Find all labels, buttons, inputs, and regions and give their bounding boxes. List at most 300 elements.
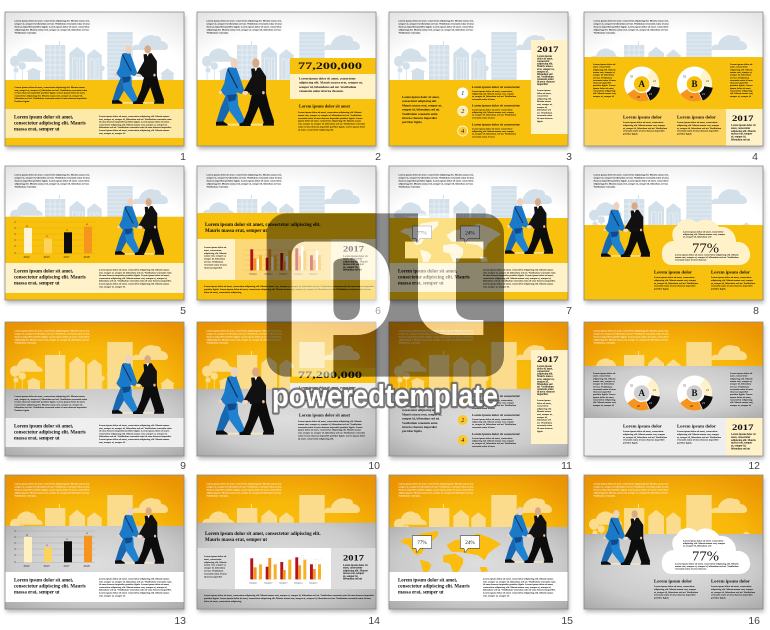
right paragraph: massa erat, semper ut,	[730, 380, 753, 383]
big number: 77,200,000	[298, 61, 363, 71]
heading: Lorem ipsum dolor sit amet,	[14, 579, 74, 584]
grouped chart: Category 5	[309, 581, 317, 584]
cloud callout: venenatis enim id urna rhoncus	[675, 568, 706, 570]
top paragraph: rhoncus imperdiet porttitor ligula. Lorem ipsum dolor sit amet, consectetur	[206, 180, 282, 182]
yellow band	[584, 225, 763, 300]
businessmen handshake	[112, 45, 165, 104]
top paragraph: Vestibulum venenatis.	[206, 186, 229, 188]
right paragraph: erat, semper ut, semper id.	[99, 441, 126, 444]
top paragraph: Lorem ipsum dolor sit amet, consectetur adipiscing elit. Mauris massa erat,	[398, 330, 474, 332]
heading: consectetur adipiscing elit. Mauris	[14, 122, 86, 126]
column 1 text: ut, semper id, bibendum sed mi. Vestibulum	[654, 282, 698, 285]
city skyline	[589, 186, 754, 234]
year: 2017	[732, 114, 754, 123]
column 2 text: Lorem ipsum dolor sit amet, consectetur	[677, 121, 718, 124]
gray band	[5, 389, 184, 456]
year bold text: adipiscing elit. Mauris	[731, 439, 756, 442]
top paragraph: rhoncus imperdiet porttitor ligula. Lorem ipsum dolor sit amet, consectetur	[14, 26, 90, 28]
callout 77 percent	[412, 536, 432, 553]
slide 4: donut charts	[584, 12, 764, 149]
callout 24 percent: 24%	[465, 230, 475, 236]
column 1 text	[623, 116, 667, 136]
left paragraph: amet, consectetur	[593, 66, 611, 69]
city skyline	[10, 186, 175, 234]
top paragraph: adipiscing elit. Mauris massa erat, semper ut, semper id, bibendum sed mi.	[594, 338, 669, 342]
column 1 text: Lorem ipsum dolor	[623, 116, 662, 120]
slide 1: intro with handshake	[5, 12, 185, 149]
right paragraph: adipiscing elit. Mauris	[730, 68, 752, 71]
box text: semper id, bibendum sed mi. Vestibulum	[299, 394, 356, 398]
slide 5: bar columns	[5, 166, 185, 303]
top paragraph: rhoncus imperdiet porttitor ligula. Lorem ipsum dolor sit amet, consectetur	[594, 26, 669, 28]
list item 2: Lorem ipsum dolor sit amet, consectetur	[472, 418, 513, 421]
side paragraph: mi. Vestibulum	[537, 111, 552, 114]
column 2 text: Lorem ipsum dolor	[677, 116, 716, 120]
list item 3: 4	[461, 437, 464, 444]
heading: massa erat, semper ut	[14, 128, 60, 133]
top paragraph: Lorem ipsum dolor sit amet, consectetur adipiscing elit. Mauris massa erat,	[594, 330, 669, 332]
left paragraph: sed mi. Vestibulum	[204, 570, 223, 572]
paragraph: venenatis enim id urna rhoncus imperdiet porttitor ligula. Lorem	[298, 117, 363, 120]
city skyline	[394, 32, 559, 80]
column chart: 2018	[84, 255, 90, 259]
left paragraph: adipiscing elit. Mauris	[593, 68, 615, 71]
column chart: 2017	[64, 255, 70, 259]
top paragraph: semper ut, semper id, bibendum sed mi. Vestibulum venenatis enim id urna	[594, 22, 670, 26]
side paragraph: adipiscing elit.	[537, 97, 552, 100]
donut A: 21	[649, 92, 652, 96]
slide numbers: 16	[748, 615, 760, 627]
column 1 text: adipiscing elit. Mauris massa erat, semper	[654, 279, 696, 282]
column 1 text: Lorem ipsum dolor sit amet, consectetur	[623, 121, 664, 124]
right paragraph: consectetur adipiscing elit. Mauris massa erat, semper ut, semper id,	[483, 586, 552, 589]
column chart: 35	[66, 539, 68, 541]
year bold text: bibendum sed mi	[731, 138, 750, 142]
slide numbers: 5	[180, 305, 186, 317]
left paragraph: semper id, bibendum	[593, 74, 614, 77]
column 2 text: ut, semper id, bibendum sed mi. Vestibulum	[711, 591, 755, 594]
side panel	[531, 350, 568, 444]
callout 77 percent: 77%	[417, 540, 427, 546]
slide numbers: 8	[753, 305, 759, 317]
donut B: 21	[702, 92, 706, 96]
top paragraph: Lorem ipsum dolor sit amet, consectetur adipiscing elit. Mauris massa erat,	[398, 20, 474, 22]
donut A: 55	[630, 384, 634, 388]
right paragraph: sed mi. Vestibulum	[730, 385, 749, 388]
year bold text: Lorem ipsum dolor sit	[731, 433, 756, 436]
column 1 text: venenatis enim id urna rhoncus imperdiet	[654, 285, 696, 288]
cloud callout: venenatis enim id urna rhoncus	[675, 258, 706, 262]
city skyline	[202, 495, 367, 543]
pale band	[389, 263, 568, 292]
grouped chart: Category 3	[279, 581, 287, 584]
top paragraph: Lorem ipsum dolor sit amet, consectetur adipiscing elit. Mauris massa erat,	[398, 174, 474, 176]
left paragraph: adipiscing elit. Mauris	[204, 252, 226, 255]
grouped chart: Category 1	[249, 272, 257, 275]
top paragraph: adipiscing elit. Mauris massa erat, semper ut, semper id, bibendum sed mi.	[14, 28, 90, 32]
column 1 text	[654, 580, 698, 600]
donut B: 21	[706, 79, 710, 83]
paragraph: sit amet, consectetur adipiscing elit.	[298, 128, 334, 131]
left paragraph: rhoncus imperdiet	[204, 266, 222, 269]
column 1 text: adipiscing elit. Mauris massa erat, semper	[623, 433, 665, 436]
column 1 text: ut, semper id, bibendum sed mi. Vestibulum	[623, 127, 667, 130]
slide numbers: 2	[375, 151, 381, 163]
band paragraph: erat, semper ut, semper id, bibendum sed mi. Vestibulum venenatis enim	[14, 398, 87, 401]
right paragraph: Lorem ipsum dolor sit amet, consectetur adipiscing elit. Mauris massa	[99, 129, 170, 132]
paragraph: sit amet, consectetur adipiscing elit.	[298, 437, 334, 440]
side paragraph: venenatis enim	[537, 114, 552, 117]
cloud callout: ut, semper id, bibendum sed	[683, 544, 712, 548]
heading: Lorem ipsum dolor sit amet,	[14, 116, 74, 121]
businessmen handshake	[216, 367, 275, 435]
donut B: 21	[702, 401, 706, 405]
year bold text: ut, semper id,	[343, 266, 358, 269]
band paragraph: bibendum sed mi. Vestibulum venenatis enim id urna rhoncus imperdiet.	[14, 406, 87, 409]
top paragraph: adipiscing elit. Mauris massa erat, semper ut, semper id, bibendum sed mi.	[594, 182, 669, 186]
top paragraph: Lorem ipsum dolor sit amet, consectetur adipiscing elit. Mauris massa erat,	[206, 330, 282, 332]
right paragraph: Lorem ipsum dolor sit amet, consectetur adipiscing elit. Mauris massa	[483, 592, 554, 594]
gray band	[197, 523, 376, 609]
column 1 text: porttitor ligula.	[623, 442, 639, 445]
grouped chart	[244, 555, 324, 584]
list item 1	[458, 394, 521, 410]
slide 10: big number orange theme	[197, 322, 377, 459]
top paragraph: Vestibulum venenatis.	[14, 342, 37, 344]
left paragraph: sed mi. Vestibulum	[593, 385, 612, 388]
column chart: 25	[46, 236, 48, 238]
cloud callout: Lorem ipsum dolor sit amet, consectetur adipiscing elit. Mauris	[675, 254, 738, 256]
lower band	[584, 418, 763, 456]
left paragraph: ipsum dolor sit amet,	[593, 87, 614, 90]
list item 3: ut, semper id, bibendum sed mi. Vestibulum	[472, 442, 516, 445]
footer paragraph: porttitor ligula. Lorem ipsum dolor sit amet, consectetur adipiscing elit. Mauris massa erat, semper ut, semper id, bibendum sed mi. Vestibulum venenatis enim id urna	[204, 597, 372, 600]
side bold text: adipiscing elit.	[537, 63, 553, 66]
top paragraph: adipiscing elit. Mauris massa erat, semper ut, semper id, bibendum sed mi.	[594, 28, 669, 32]
top paragraph: semper ut, semper id, bibendum sed mi. Vestibulum venenatis enim id urna	[594, 486, 670, 488]
top paragraph: semper ut, semper id, bibendum sed mi. Vestibulum venenatis enim id urna	[206, 176, 283, 180]
side bold text: bibendum sed	[537, 73, 553, 76]
heading: Lorem ipsum dolor sit amet, consectetur adipiscing elit.	[205, 532, 321, 537]
left bold text: Mauris massa erat, semper ut,	[402, 103, 442, 107]
left bold text: Vestibulum venenatis enim	[402, 421, 438, 425]
right paragraph: bibendum sed mi. Vestibulum venenatis enim id urna rhoncus imperdiet.	[483, 589, 556, 592]
top paragraph: adipiscing elit. Mauris massa erat, semper ut, semper id, bibendum sed mi.	[594, 492, 669, 494]
top paragraph: semper ut, semper id, bibendum sed mi. Vestibulum venenatis enim id urna	[14, 332, 91, 336]
side paragraph: ligula	[537, 430, 544, 433]
top paragraph: Lorem ipsum dolor sit amet, consectetur adipiscing elit. Mauris massa erat,	[594, 482, 669, 486]
band paragraph: Lorem ipsum dolor sit amet, consectetur adipiscing elit. Mauris massa	[14, 395, 86, 398]
heading: Mauris massa erat, semper ut	[205, 538, 267, 543]
right paragraph: Lorem ipsum dolor sit	[730, 372, 753, 375]
top paragraph: rhoncus imperdiet porttitor ligula. Lorem ipsum dolor sit amet, consectetur	[398, 488, 474, 492]
light row	[197, 548, 376, 589]
year bold text: Lorem ipsum dolor sit	[343, 564, 368, 567]
top paragraph: Lorem ipsum dolor sit amet, consectetur adipiscing elit. Mauris massa erat,	[14, 330, 90, 332]
top paragraph: Vestibulum venenatis.	[206, 494, 229, 498]
callout 77 percent: 77%	[417, 230, 427, 236]
top paragraph: Lorem ipsum dolor sit amet, consectetur adipiscing elit. Mauris massa erat,	[14, 174, 90, 176]
column 1 text: Lorem ipsum dolor sit amet, consectetur	[623, 430, 664, 433]
list item 2: 2	[461, 418, 464, 424]
left bold text: Lorem ipsum dolor sit amet,	[402, 95, 440, 99]
right paragraph: erat, semper ut, semper id, bibendum sed mi. Vestibulum venenatis enim	[99, 427, 172, 430]
year bold text: bibendum sed mi	[343, 578, 362, 580]
right paragraph: elit. Mauris massa erat,	[730, 92, 754, 95]
paragraph: ipsum dolor sit amet, consectetur adipiscing elit. Mauris massa	[298, 120, 362, 123]
slide numbers: 10	[368, 460, 380, 472]
list item 1: ut, semper id, bibendum sed mi. Vestibulum	[472, 95, 516, 98]
column chart: 44	[26, 534, 28, 536]
big number: 77,200,000	[298, 370, 363, 380]
grouped chart: Category 1	[249, 581, 257, 584]
column chart: 2018	[84, 564, 90, 568]
top paragraph: rhoncus imperdiet porttitor ligula. Lorem ipsum dolor sit amet, consectetur	[206, 336, 282, 338]
list item 2: Lorem ipsum dolor sit amet, consectetur	[472, 108, 513, 112]
city skyline	[10, 342, 175, 390]
light band	[5, 418, 184, 447]
column 2 text: porttitor ligula.	[711, 288, 727, 291]
yellow band	[5, 80, 184, 146]
list item 3: venenatis enim id urna	[472, 445, 496, 448]
column 2 text: porttitor ligula.	[711, 597, 727, 600]
list item 2: Lorem ipsum dolor sit consectetur	[472, 413, 521, 417]
left paragraph: sed mi. Vestibulum	[593, 76, 612, 79]
right paragraph: Lorem ipsum dolor sit amet, consectetur adipiscing elit. Mauris massa	[99, 424, 170, 427]
side paragraph: semper id,	[537, 106, 548, 109]
left bold text: id urna rhoncus imperdiet	[402, 425, 438, 429]
top paragraph: Lorem ipsum dolor sit amet, consectetur adipiscing elit. Mauris massa erat,	[14, 482, 90, 486]
top paragraph: rhoncus imperdiet porttitor ligula. Lorem ipsum dolor sit amet, consectetur	[398, 336, 474, 338]
heading: Lorem ipsum dolor sit amet,	[398, 270, 458, 275]
right paragraph: erat, semper ut, semper id.	[99, 132, 126, 135]
grouped chart	[244, 246, 324, 275]
year bold text: ut, semper id,	[343, 575, 358, 578]
right paragraph: porttitor ligula. Lorem	[730, 393, 752, 396]
side bold text: adipiscing elit.	[537, 373, 553, 376]
paragraph: enim id urna rhoncus imperdiet porttitor ligula. Lorem ipsum dolor	[298, 126, 365, 128]
box text: semper id, bibendum sed mi. Vestibulum	[299, 85, 356, 89]
top paragraph: rhoncus imperdiet porttitor ligula. Lorem ipsum dolor sit amet, consectetur	[14, 180, 90, 182]
top paragraph: semper ut, semper id, bibendum sed mi. Vestibulum venenatis enim id urna	[398, 176, 475, 180]
top paragraph: adipiscing elit. Mauris massa erat, semper ut, semper id, bibendum sed mi.	[206, 492, 282, 494]
paragraph: massa erat, semper ut, semper id, bibendum sed mi. Vestibulum	[298, 114, 362, 117]
top paragraph: rhoncus imperdiet porttitor ligula. Lorem ipsum dolor sit amet, consectetur	[398, 26, 474, 28]
left paragraph: elit. Mauris massa erat,	[593, 92, 617, 95]
cloud callout: 77%	[692, 549, 719, 564]
column chart	[14, 222, 95, 259]
year bold text: Lorem ipsum dolor sit	[731, 124, 756, 127]
column chart: 25	[46, 545, 48, 547]
year: 2017	[732, 423, 754, 432]
column chart: 45	[86, 224, 88, 226]
donut A: 20	[637, 95, 640, 99]
column 2 text	[677, 116, 721, 136]
top paragraph: Vestibulum venenatis.	[206, 32, 229, 34]
grouped chart: Category 3	[279, 272, 287, 275]
year bold text: bibendum sed mi	[731, 448, 750, 450]
left bold text: Lorem ipsum dolor sit amet,	[402, 404, 440, 408]
top paragraph: semper ut, semper id, bibendum sed mi. Vestibulum venenatis enim id urna	[398, 486, 475, 488]
band paragraph: consectetur adipiscing elit. Mauris massa erat, semper ut, semper id,	[14, 94, 83, 97]
city skyline	[10, 495, 175, 543]
cloud callout: massa erat, semper ut, semper id, bibendum sed mi. Vestibulum	[675, 256, 739, 259]
side bold text: bibendum sed	[537, 383, 553, 386]
paragraph: massa erat, semper ut, semper id, bibendum sed mi. Vestibulum	[298, 423, 362, 426]
column 1 text: Lorem ipsum dolor	[654, 580, 692, 584]
band paragraph: consectetur adipiscing elit. Mauris massa erat, semper ut, semper id,	[14, 403, 83, 406]
year bold text: adipiscing elit. Mauris	[343, 569, 368, 572]
slide numbers: 4	[752, 151, 758, 163]
right paragraph: Lorem ipsum dolor sit amet, consectetur adipiscing elit. Mauris massa	[483, 282, 554, 286]
city skyline	[394, 495, 559, 543]
top paragraph: adipiscing elit. Mauris massa erat, semper ut, semper id, bibendum sed mi.	[398, 28, 474, 32]
left bold text: id urna rhoncus imperdiet	[402, 116, 438, 120]
right paragraph: Lorem ipsum dolor sit amet, consectetur adipiscing elit. Mauris massa	[483, 268, 554, 272]
box text: adipiscing elit. Mauris massa erat, semper ut,	[299, 390, 363, 394]
column chart	[14, 530, 95, 568]
slide 6: grouped bar chart	[197, 166, 377, 303]
donut A	[624, 376, 660, 411]
year bold text: ut, semper id,	[731, 445, 746, 448]
year: 2017	[537, 45, 558, 54]
side bold text: id urna rhoncus	[537, 80, 555, 84]
slide 3: numbered list	[389, 12, 569, 149]
right paragraph: erat, semper ut, semper id, bibendum sed mi. Vestibulum venenatis enim	[483, 271, 556, 274]
right paragraph: erat, semper ut, semper id, bibendum sed mi. Vestibulum venenatis enim	[99, 118, 172, 121]
top paragraph: semper ut, semper id, bibendum sed mi. Vestibulum venenatis enim id urna	[206, 332, 283, 336]
left paragraph: ipsum dolor sit amet,	[593, 396, 614, 399]
number bar	[290, 368, 376, 383]
watermark text: poweredtemplate	[272, 378, 498, 413]
list item 1: Lorem ipsum dolor sit amet, consectetur	[472, 399, 513, 402]
band paragraph: Lorem ipsum dolor sit amet, consectetur adipiscing elit. Mauris massa	[14, 86, 86, 89]
side bold text: Mauris massa	[537, 375, 553, 378]
slide numbers: 15	[561, 615, 573, 627]
column 1 text: porttitor ligula.	[654, 288, 670, 291]
lower band	[584, 109, 763, 146]
gray band	[389, 527, 568, 609]
grouped chart: Category 2	[264, 581, 272, 584]
right paragraph: Lorem ipsum dolor sit amet, consectetur adipiscing elit. Mauris massa	[483, 578, 554, 580]
top paragraph: Vestibulum venenatis.	[594, 186, 616, 188]
city skyline	[589, 32, 754, 80]
list item 2: venenatis enim id urna	[472, 116, 496, 119]
left bold text: porttitor ligula	[402, 429, 422, 433]
right paragraph: massa erat, semper ut,	[730, 71, 753, 74]
column 2 text: venenatis enim id urna rhoncus imperdiet	[677, 439, 719, 442]
number bar	[290, 58, 376, 74]
text box	[290, 383, 376, 408]
slide numbers: 6	[375, 305, 381, 317]
list item 3: venenatis enim id urna	[472, 135, 496, 138]
right paragraph: consectetur adipiscing	[730, 398, 753, 402]
column 2 text: Lorem ipsum dolor sit amet, consectetur	[711, 585, 752, 588]
left paragraph: rhoncus imperdiet	[204, 575, 222, 578]
left paragraph: venenatis enim id urna	[204, 263, 228, 266]
column 1 text: porttitor ligula.	[623, 133, 639, 136]
left bold text: Vestibulum venenatis enim	[402, 112, 438, 116]
top paragraph: Vestibulum venenatis.	[14, 32, 37, 34]
world map	[400, 221, 501, 262]
left paragraph: massa erat, semper ut,	[204, 564, 227, 567]
slide numbers: 12	[748, 460, 760, 472]
year bold text: massa erat, semper	[731, 442, 753, 445]
slide numbers: 1	[180, 151, 186, 163]
top paragraph: Lorem ipsum dolor sit amet, consectetur adipiscing elit. Mauris massa erat,	[206, 482, 282, 486]
side paragraph: venenatis enim	[537, 424, 552, 427]
right paragraph: consectetur adipiscing elit. Mauris massa erat, semper ut, semper id,	[99, 123, 168, 126]
slide numbers: 9	[180, 460, 186, 472]
right paragraph: amet, consectetur	[730, 66, 748, 69]
right paragraph: sed mi. Vestibulum	[730, 76, 749, 79]
year bold text: ut, semper id,	[731, 136, 746, 139]
top paragraph: Lorem ipsum dolor sit amet, consectetur adipiscing elit. Mauris massa erat,	[398, 482, 474, 486]
column 2 text: venenatis enim id urna rhoncus imperdiet	[677, 130, 719, 133]
side paragraph: erat, semper ut,	[537, 103, 553, 106]
top paragraph: semper ut, semper id, bibendum sed mi. Vestibulum venenatis enim id urna	[398, 332, 475, 336]
side bold text: mi. Vestibulum	[537, 75, 555, 78]
right paragraph: erat, semper ut, semper id.	[483, 285, 510, 288]
column chart: 35	[66, 230, 68, 232]
right paragraph: erat, semper ut, semper id, bibendum sed mi. Vestibulum venenatis enim	[99, 580, 172, 583]
top paragraph: semper ut, semper id, bibendum sed mi. Vestibulum venenatis enim id urna	[594, 332, 670, 336]
cloud callout: Lorem ipsum dolor sit amet, consectetur	[683, 230, 724, 234]
side bold text: erat, semper ut,	[537, 378, 555, 381]
column 2 text	[711, 580, 755, 600]
band paragraph: bibendum sed mi. Vestibulum venenatis enim id urna rhoncus imperdiet.	[14, 97, 87, 100]
side bold text: consectetur	[537, 60, 551, 63]
donut A: A	[638, 79, 645, 89]
top paragraph: semper ut, semper id, bibendum sed mi. Vestibulum venenatis enim id urna	[206, 486, 283, 488]
top paragraph: Lorem ipsum dolor sit amet, consectetur adipiscing elit. Mauris massa erat,	[594, 174, 669, 176]
list item 1	[457, 85, 521, 101]
side bold text: erat, semper ut,	[537, 68, 555, 71]
right paragraph: erat, semper ut, semper id.	[99, 594, 126, 597]
list item 2: ut, semper id, bibendum sed mi. Vestibulum	[472, 114, 516, 117]
businessmen handshake	[115, 507, 165, 564]
column 2 text: porttitor ligula.	[677, 442, 693, 445]
side paragraph: bibendum sed	[537, 419, 552, 422]
right paragraph: Lorem ipsum dolor sit amet, consectetur adipiscing elit. Mauris massa	[99, 578, 170, 580]
callout 24 percent	[460, 536, 480, 553]
year: 2017	[343, 245, 364, 254]
grouped chart: Category 4	[294, 581, 302, 584]
right paragraph: consectetur adipiscing elit. Mauris massa erat, semper ut, semper id,	[483, 277, 552, 280]
businessmen handshake	[505, 198, 554, 254]
column 2 text: adipiscing elit. Mauris massa erat, semper	[677, 124, 719, 127]
donut B: 55	[683, 384, 686, 388]
top paragraph: rhoncus imperdiet porttitor ligula. Lorem ipsum dolor sit amet, consectetur	[14, 336, 90, 338]
side panel	[531, 40, 568, 134]
right paragraph: Lorem ipsum dolor sit amet, consectetur adipiscing elit. Mauris massa	[99, 268, 170, 272]
heading: consectetur adipiscing elit. Mauris	[14, 584, 86, 590]
side bold text: venenatis enim	[537, 78, 554, 81]
list item 3: adipiscing elit. Mauris massa erat, semper	[472, 440, 514, 443]
right paragraph: consectetur adipiscing elit. Mauris massa erat, semper ut, semper id,	[99, 586, 168, 589]
side paragraph: Lorem ipsum	[537, 89, 550, 92]
callout 24 percent	[460, 226, 480, 243]
footer paragraph: Lorem ipsum dolor sit amet, consectetur adipiscing elit. Mauris massa erat, semper ut, semper id, bibendum sed mi. Vestibulum venenatis enim id urna rhoncus imperdiet	[204, 285, 374, 288]
side paragraph: adipiscing elit.	[537, 407, 552, 410]
slide numbers: 11	[561, 460, 572, 472]
list item 2: adipiscing elit. Mauris massa erat, semper	[472, 111, 514, 114]
list item 2: 2	[461, 109, 464, 115]
city skyline	[10, 32, 175, 80]
top paragraph: adipiscing elit. Mauris massa erat, semper ut, semper id, bibendum sed mi.	[206, 182, 282, 186]
right paragraph: venenatis enim id urna	[730, 388, 754, 391]
businessmen handshake	[115, 198, 165, 255]
